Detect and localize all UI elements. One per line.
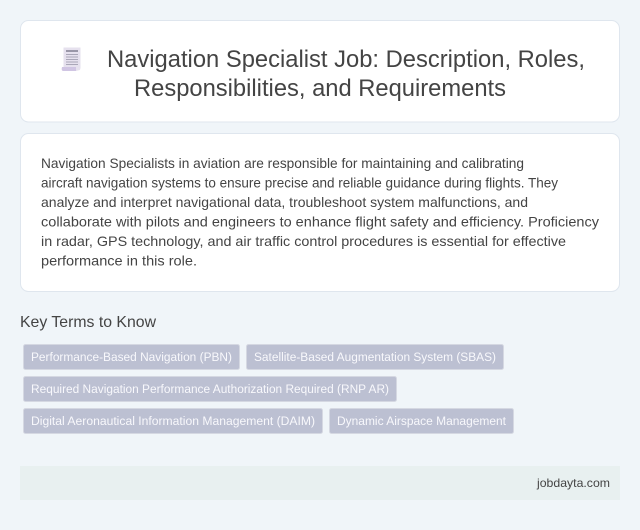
tag: SBAS: Satellite-Based Augmentation System (SBAS) [254,350,496,364]
tag: DAIM: Digital Aeronautical Information Management (DAIM) [31,414,315,428]
panel: description [20,134,620,292]
tag: dynamic airspace [330,408,514,434]
text block: description: Navigation Specialists in aviation are responsible for maintaining and calibrating [41,155,524,171]
heading: title [107,46,585,102]
icon: document scroll [62,48,80,71]
text block: description [41,155,599,268]
tag: RNP AR: Required Navigation Performance Authorization Required (RNP AR) [31,382,389,396]
text block: description: collaborate with pilots and engineers to enhance flight safety and efficiency. Proficiency [41,214,599,230]
tag: DAIM [24,408,322,434]
tag: RNP AR [24,376,396,402]
tag: SBAS [246,344,504,370]
text block: description: aircraft navigation systems to ensure precise and reliable guidance during flights. They [41,174,558,190]
tag list [24,344,514,434]
text block: description: in radar, GPS technology, and air traffic control procedures is essential for effective [41,233,566,249]
tag: dynamic airspace: Dynamic Airspace Management [337,414,507,428]
text block: description: performance in this role. [41,252,197,268]
footer [20,466,620,500]
text block: description: analyze and interpret navigational data, troubleshoot system malfunctions, and [41,194,528,210]
footer: jobdayta.com [536,476,610,490]
heading: title: Responsibilities, and Requirements [134,75,506,102]
tag: PBN [24,344,240,370]
heading: key terms: Key Terms to Know [20,314,156,331]
panel: title card [20,20,620,122]
heading: title: Navigation Specialist Job: Description, Roles, [107,46,585,73]
tag: PBN: Performance-Based Navigation (PBN) [31,350,232,364]
